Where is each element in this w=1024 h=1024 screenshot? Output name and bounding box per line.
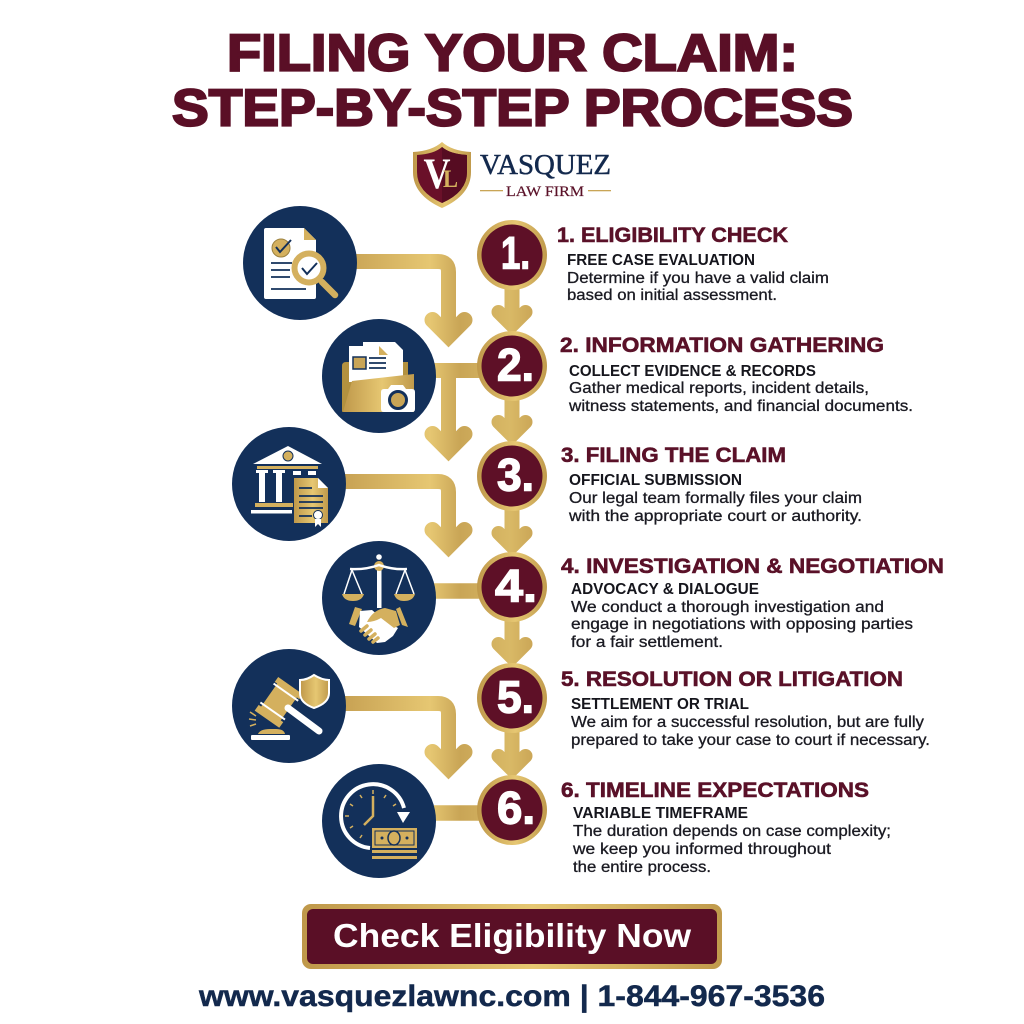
step number 6: 6. bbox=[497, 782, 535, 834]
step number 3 bbox=[477, 441, 547, 511]
footer contact line: www.vasquezlawnc.com | 1-844-967-3536 bbox=[198, 980, 825, 1013]
icon: courthouse with document bbox=[232, 427, 346, 541]
logo shield: L bbox=[443, 166, 458, 193]
step 4 text: for a fair settlement. bbox=[571, 634, 723, 651]
logo shield: V bbox=[424, 151, 450, 198]
logo shield bbox=[413, 142, 471, 208]
step 4 text: We conduct a thorough investigation and bbox=[571, 599, 884, 616]
icon: gavel and shield bbox=[232, 649, 346, 763]
step 1 text: Determine if you have a valid claim bbox=[567, 270, 829, 287]
step 2 text bbox=[560, 333, 913, 415]
connector bar: icon 4 to step 4 bbox=[434, 583, 480, 599]
step 6 text: the entire process. bbox=[573, 859, 711, 876]
connector arrow: step 2 to icon 2 and down bbox=[432, 370, 480, 450]
connector arrow: icon 3 to step 4 bbox=[344, 482, 464, 546]
step 3 text: Our legal team formally files your claim bbox=[569, 490, 862, 507]
logo subtitle bbox=[480, 184, 611, 200]
icon: scales of justice and handshake bbox=[322, 541, 436, 655]
step 6 text bbox=[561, 778, 891, 876]
step number 3: 3. bbox=[497, 450, 534, 500]
call-to-action button: Check Eligibility Now bbox=[333, 917, 691, 954]
step number 5 bbox=[477, 663, 547, 733]
step 2 text: 2. INFORMATION GATHERING bbox=[560, 333, 884, 357]
title bbox=[172, 24, 853, 138]
step 5 text: 5. RESOLUTION OR LITIGATION bbox=[561, 667, 903, 691]
step number 1 bbox=[477, 220, 547, 290]
connector arrow: icon 5 to step 6 bbox=[344, 704, 464, 768]
step number 4 bbox=[477, 552, 547, 622]
title: FILING YOUR CLAIM: bbox=[227, 24, 798, 82]
step 1 text bbox=[557, 223, 829, 304]
vertical arrow: step 2 to 3 bbox=[498, 396, 526, 436]
step 4 text: 4. INVESTIGATION & NEGOTIATION bbox=[561, 554, 944, 578]
vertical arrow: step 4 to 5 bbox=[498, 617, 526, 658]
step 5 text bbox=[561, 667, 930, 749]
step 6 text: The duration depends on case complexity; bbox=[573, 823, 891, 840]
step number 1: 1. bbox=[501, 228, 530, 278]
call-to-action button bbox=[302, 904, 722, 969]
logo subtitle: LAW FIRM bbox=[506, 184, 584, 200]
step 3 text: with the appropriate court or authority. bbox=[568, 508, 862, 525]
step 2 text: Gather medical reports, incident details, bbox=[569, 380, 869, 397]
step 5 text: We aim for a successful resolution, but are fully bbox=[571, 714, 924, 731]
step 1 text: FREE CASE EVALUATION bbox=[567, 252, 755, 269]
step 3 text: 3. FILING THE CLAIM bbox=[561, 443, 786, 467]
logo wordmark: VASQUEZ bbox=[480, 149, 611, 181]
step 6 text: we keep you informed throughout bbox=[572, 841, 832, 858]
step 4 text bbox=[561, 554, 944, 651]
step number 2 bbox=[477, 331, 547, 401]
logo: Vasquez Law Firm bbox=[413, 142, 611, 208]
step 6 text: 6. TIMELINE EXPECTATIONS bbox=[561, 778, 869, 802]
step number 5: 5. bbox=[497, 672, 534, 722]
icon: folder with documents and camera bbox=[322, 319, 436, 433]
step 1 text: based on initial assessment. bbox=[567, 287, 777, 304]
connector arrow: icon 1 to step 2 bbox=[356, 262, 464, 336]
title: STEP-BY-STEP PROCESS bbox=[172, 80, 853, 138]
step 6 text: VARIABLE TIMEFRAME bbox=[573, 805, 748, 822]
vertical arrow: step 3 to 4 bbox=[498, 506, 526, 547]
step 2 text: witness statements, and financial documents. bbox=[568, 398, 913, 415]
step 3 text bbox=[561, 443, 862, 525]
step number 4: 4. bbox=[495, 560, 537, 612]
icon: clock and money bbox=[322, 764, 436, 878]
connector bar: icon 6 to step 6 bbox=[434, 805, 480, 821]
step 3 text: OFFICIAL SUBMISSION bbox=[569, 472, 742, 489]
step 4 text: ADVOCACY & DIALOGUE bbox=[571, 581, 759, 598]
step 2 text: COLLECT EVIDENCE & RECORDS bbox=[569, 363, 816, 380]
step number 6 bbox=[477, 775, 547, 845]
vertical arrow: step 5 to 6 bbox=[498, 728, 526, 770]
step 1 text: 1. ELIGIBILITY CHECK bbox=[557, 223, 788, 247]
step 5 text: SETTLEMENT OR TRIAL bbox=[571, 696, 749, 713]
vertical arrow: step 1 to 2 bbox=[498, 285, 526, 326]
step 4 text: engage in negotiations with opposing parties bbox=[571, 616, 913, 633]
step number 2: 2. bbox=[497, 340, 534, 390]
step 5 text: prepared to take your case to court if necessary. bbox=[571, 732, 930, 749]
icon: document with magnifying glass bbox=[243, 206, 357, 320]
